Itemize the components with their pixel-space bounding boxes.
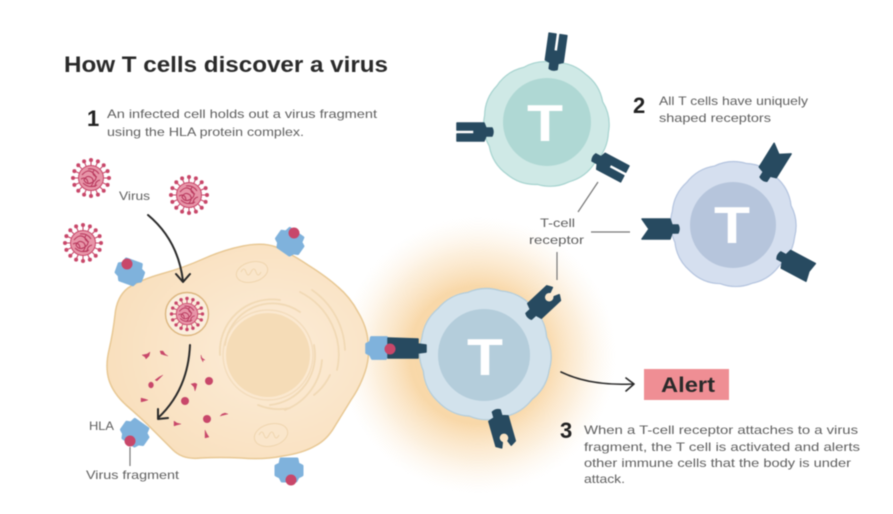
arrow: alert: [561, 372, 634, 391]
HLA bound to receptor: [367, 338, 426, 358]
alert badge: [644, 369, 729, 400]
arrow: virus enters cell: [148, 215, 190, 282]
vesicle with virus: [166, 292, 208, 336]
mitochondria: [234, 258, 290, 450]
step 2 text: [633, 93, 808, 125]
virus fragments: [141, 351, 228, 438]
infected cell: [107, 215, 369, 459]
step 1 text: using the HLA protein complex.: [107, 125, 304, 139]
T-cell receptor label: T-cell: [540, 216, 575, 230]
step 3 text: 3: [560, 418, 572, 443]
HLA proteins with fragments: [114, 226, 307, 486]
step 1 text: 1: [87, 106, 99, 131]
alert badge: Alert: [661, 374, 715, 397]
T-cell receptor label: [529, 182, 630, 280]
step 3 text: other immune cells that the body is under: [584, 456, 851, 470]
step 3 text: attack.: [584, 472, 625, 486]
step 2 text: All T cells have uniquely: [659, 94, 808, 108]
arrow: fragments reach HLA: [158, 345, 190, 419]
teal T cell: T: [527, 95, 563, 153]
HLA label: HLA: [89, 419, 114, 433]
step 3 text: When a T-cell receptor attaches to a virus: [584, 423, 858, 437]
virus label: Virus: [119, 189, 150, 203]
step 2 text: shaped receptors: [659, 111, 771, 125]
free viruses: [63, 158, 209, 263]
lavender T cell: [642, 143, 815, 298]
T-cell receptor label: receptor: [529, 233, 584, 247]
activated T cell: [367, 274, 565, 449]
virus fragment label: [86, 447, 180, 482]
step 3 text: fragment, the T cell is activated and alerts: [584, 440, 860, 454]
activated T cell: T: [467, 329, 503, 387]
step 2 text: 2: [633, 93, 645, 118]
step 1 text: An infected cell holds out a virus fragment: [107, 107, 378, 121]
virus fragment label: Virus fragment: [86, 468, 180, 482]
title: How T cells discover a virus: [64, 52, 388, 77]
nucleus: [220, 290, 345, 410]
lavender T cell: T: [714, 197, 750, 255]
step 1 text: [87, 106, 378, 139]
step 3 text: [560, 418, 860, 486]
activation glow: [340, 217, 616, 493]
teal T cell: [457, 33, 629, 194]
